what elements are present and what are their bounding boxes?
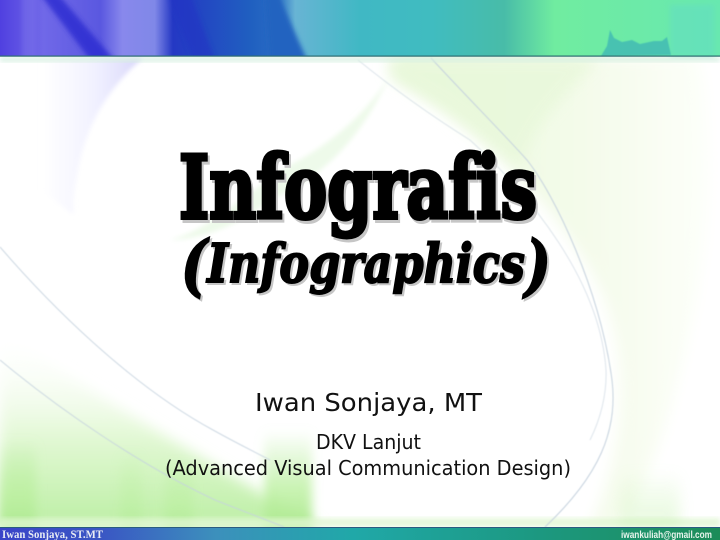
subtitle: ) xyxy=(522,226,551,304)
course description xyxy=(165,430,571,480)
background shape: bottom green wash xyxy=(0,330,720,527)
subtitle: ) xyxy=(524,228,553,306)
top banner xyxy=(0,0,720,62)
course description: DKV Lanjut xyxy=(316,430,421,454)
banner map shape xyxy=(601,5,714,56)
main title: Infografis xyxy=(179,136,537,239)
subtitle xyxy=(181,226,553,306)
course description: (Advanced Visual Communication Design) xyxy=(165,456,571,480)
subtitle: Infographics xyxy=(206,233,525,295)
background shape: upper right green wash xyxy=(388,58,709,527)
subtitle: ( xyxy=(181,226,210,304)
background curved lines xyxy=(0,58,613,527)
main title: Infografis xyxy=(181,139,539,242)
background shape: central green band xyxy=(170,75,390,240)
subtitle: ( xyxy=(183,228,212,306)
footer bar xyxy=(0,527,720,540)
banner diagonal streaks xyxy=(22,0,308,56)
background shape: lavender left swoosh xyxy=(40,58,143,215)
subtitle: Infographics xyxy=(208,235,527,297)
author name: Iwan Sonjaya, MT xyxy=(255,388,483,417)
